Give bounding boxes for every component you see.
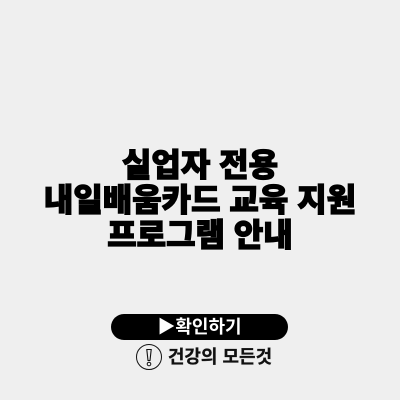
button: confirm: [111, 314, 288, 340]
title: 내일배움카드 교육 지원: [44, 182, 356, 218]
title: [44, 147, 356, 253]
brand text: 건강의 모든것: [168, 347, 272, 367]
icon: exclamation in circle: [136, 344, 162, 370]
button: confirm: ▶확인하기: [157, 317, 242, 337]
title: 실업자 전용: [122, 147, 278, 183]
title: 프로그램 안내: [107, 217, 293, 253]
